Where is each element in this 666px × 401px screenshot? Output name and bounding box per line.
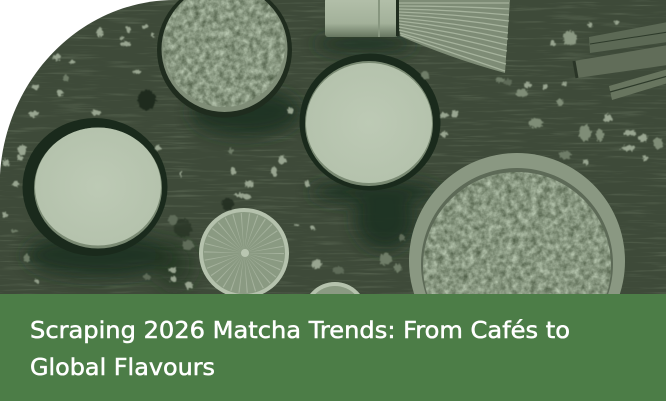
milk matcha cup, centre <box>300 54 440 190</box>
scattered flower specks <box>2 20 663 289</box>
second lime slice <box>310 282 360 294</box>
title line 1: Scraping 2026 Matcha Trends: From Cafés to <box>30 318 570 344</box>
cinnamon sticks <box>574 22 666 100</box>
blackberries <box>138 90 234 237</box>
photo: matcha flat lay <box>0 0 666 294</box>
title banner <box>0 294 666 401</box>
bamboo whisk <box>325 0 510 73</box>
lime slice <box>199 208 289 298</box>
big wooden bowl of powder <box>409 153 625 294</box>
bowl shadows <box>25 35 440 289</box>
whisk tines <box>398 0 510 73</box>
title line 2: Global Flavours <box>30 355 215 381</box>
milk matcha cup, left <box>22 118 168 256</box>
whisk handle <box>325 0 398 37</box>
slate table background <box>0 0 666 294</box>
powder bowl, top <box>157 0 292 118</box>
title text <box>30 318 570 381</box>
table surface streaks <box>0 0 666 294</box>
